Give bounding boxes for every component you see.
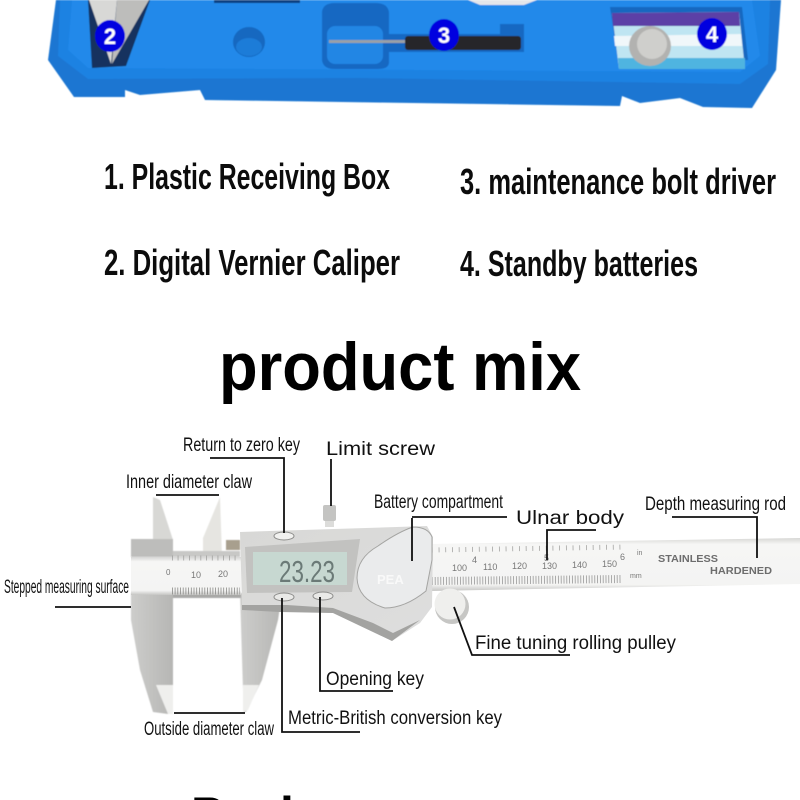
label: inner diameter claw: Inner diameter claw [126, 472, 252, 493]
beam scale marks: HARDENED [710, 565, 772, 577]
chart: digital caliper diagram [4, 435, 800, 740]
item 2: 2. Digital Vernier Caliper [104, 242, 400, 283]
LCD display [253, 552, 347, 589]
beam scale marks: 120 [512, 561, 527, 571]
panel: blue plastic receiving box [48, 0, 781, 108]
label: outside diameter claw: Outside diameter claw [144, 719, 274, 740]
label: metric-british conversion key: Metric-British conversion key [288, 708, 502, 729]
ruler beam right of head [430, 538, 800, 591]
top fragments cut off by the image edge [214, 0, 300, 3]
icon: standby batteries card [610, 7, 748, 69]
caliper head body [240, 526, 433, 641]
ruler beam left of head [131, 557, 241, 595]
badge 3 [429, 19, 459, 51]
tray hole [233, 27, 265, 57]
beam scale marks: 150 [602, 559, 617, 569]
icon: maintenance bolt driver [329, 36, 521, 50]
label: opening key: Opening key [326, 669, 424, 690]
beam scale marks: 5 [544, 553, 549, 563]
label: return to zero key: Return to zero key [183, 435, 300, 456]
item 1: 1. Plastic Receiving Box [104, 156, 390, 197]
beam scale marks: 100 [452, 563, 467, 573]
badge 4: 4 [706, 22, 719, 47]
beam scale marks: 4 [472, 555, 477, 565]
opening key [313, 592, 333, 600]
item 4: 4. Standby batteries [460, 243, 698, 284]
LCD display: 23.23 [279, 554, 335, 589]
leader lines [55, 458, 757, 732]
badge 2: 2 [104, 24, 116, 49]
beam scale marks: 130 [542, 561, 557, 571]
beam scale marks: STAINLESS [658, 553, 718, 565]
heading: product mix: product mix [219, 329, 581, 405]
beam scale marks: 140 [572, 560, 587, 570]
limit screw [323, 505, 336, 527]
beam scale marks: 10 [191, 570, 201, 580]
return to zero key [274, 532, 294, 540]
badge 4 [697, 18, 727, 50]
label: stepped measuring surface: Stepped measuring surface [4, 577, 129, 598]
label: battery compartment: Battery compartment [374, 492, 504, 513]
icon: caliper jaws tip in box [88, 0, 150, 68]
beam scale marks [166, 547, 772, 591]
caliper upper inner claws [131, 497, 240, 557]
beam scale marks: in [637, 550, 643, 557]
label: limit screw: Limit screw [326, 439, 435, 460]
metric-british key [274, 593, 294, 601]
label: ulnar body: Ulnar body [516, 508, 625, 529]
caliper lower outside claws [131, 593, 282, 714]
badge 2 [95, 20, 125, 52]
beam scale marks: 0 [166, 568, 171, 577]
text block: parts list [104, 156, 776, 284]
label: fine tuning rolling pulley: Fine tuning rolling pulley [475, 633, 676, 654]
battery compartment cover [357, 527, 432, 608]
fine tuning rolling pulley [434, 588, 469, 624]
badge 3: 3 [438, 23, 450, 48]
beam scale marks: 20 [218, 569, 228, 579]
beam scale marks: 110 [483, 562, 497, 572]
beam scale marks: 6 [620, 552, 625, 562]
beam scale marks: mm [630, 573, 642, 580]
caliper head body: PEA [377, 572, 404, 587]
screwdriver recess [322, 3, 524, 69]
